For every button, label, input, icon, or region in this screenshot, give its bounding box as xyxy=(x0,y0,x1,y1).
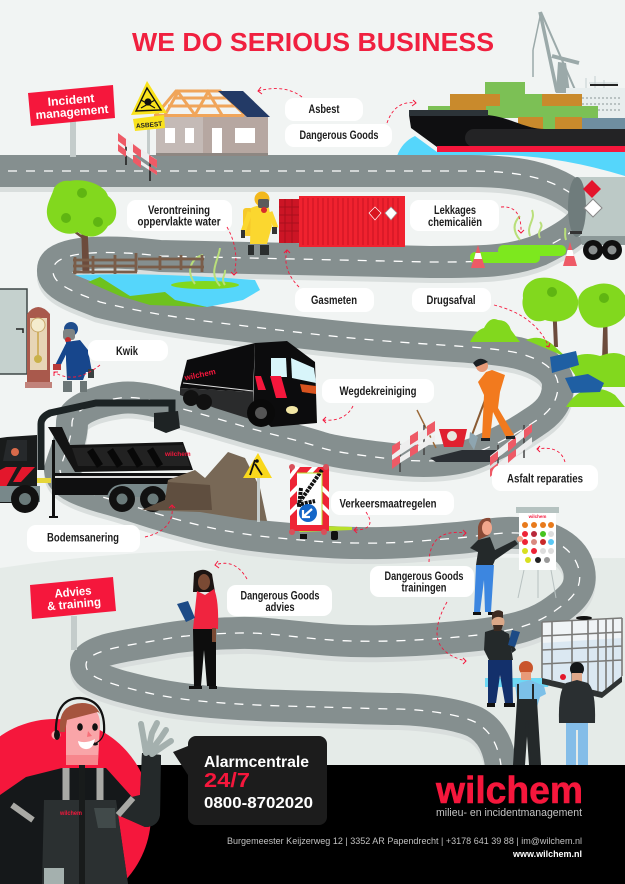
bearded man with clipboard xyxy=(484,610,520,707)
label: dangerous goods trainingen xyxy=(370,566,474,597)
black road cleaning truck: wilchem xyxy=(183,367,217,383)
road network xyxy=(0,171,586,780)
water under ship xyxy=(397,136,625,176)
trees and bushes right xyxy=(470,278,625,407)
label: lekkages chemicalien: chemicaliën xyxy=(428,217,482,229)
IBC tank on pallet xyxy=(485,616,622,698)
label: asbest xyxy=(285,98,363,121)
label: dangerous goods advies: advies xyxy=(266,602,294,614)
label: wegdekreiniging xyxy=(322,379,434,403)
hazmat person xyxy=(241,192,277,255)
label: gasmeten: Gasmeten xyxy=(311,295,357,307)
man in dark jacket xyxy=(559,662,595,765)
alarm centre callout: 24/7 xyxy=(204,770,250,792)
label: drugsafval xyxy=(412,288,491,312)
label: kwik xyxy=(88,340,168,361)
label: dangerous goods xyxy=(285,124,392,147)
label: verontreining oppervlakte water xyxy=(127,200,232,231)
alarm centre callout: Alarmcentrale xyxy=(204,754,309,771)
label: dangerous goods trainingen: Dangerous Goods xyxy=(384,571,464,583)
asbest warning sign xyxy=(131,81,167,156)
red container xyxy=(279,196,405,247)
label: verontreining oppervlakte water: oppervlakte water xyxy=(138,216,221,228)
call centre agent xyxy=(0,698,171,884)
tree left xyxy=(47,180,116,272)
chemical spill with cones xyxy=(470,210,577,268)
label: verkeersmaatregelen: Verkeersmaatregelen xyxy=(340,498,436,510)
label: dangerous goods: Dangerous Goods xyxy=(300,130,378,142)
label: asfalt reparaties: Asfalt reparaties xyxy=(507,474,583,486)
trainer woman xyxy=(470,518,523,615)
flipchart with hazard diamonds xyxy=(516,507,559,598)
advisor woman in red xyxy=(177,570,218,689)
alarm centre callout: 0800-8702020 xyxy=(204,795,313,812)
label: drugsafval: Drugsafval xyxy=(426,295,476,307)
container ship xyxy=(409,76,625,152)
road barrier top xyxy=(118,133,157,181)
pond with reeds and slime xyxy=(75,248,260,307)
sign: incident management xyxy=(28,85,115,157)
label: bodemsanering: Bodemsanering xyxy=(47,532,119,544)
label: verkeersmaatregelen xyxy=(331,491,454,515)
harbour crane xyxy=(533,12,579,93)
road repair: barriers and hole xyxy=(392,410,532,477)
road worker with shovel xyxy=(469,359,515,450)
door xyxy=(0,289,27,374)
label: dangerous goods trainingen: trainingen xyxy=(402,582,446,594)
sign: incident management: Incident xyxy=(47,91,95,109)
label: lekkages chemicalien: Lekkages xyxy=(434,205,476,217)
soil pile xyxy=(142,452,267,521)
label: bodemsanering xyxy=(27,525,140,552)
label: lekkages chemicalien xyxy=(410,200,499,231)
lower landscape band xyxy=(0,550,625,770)
sign: advies and training: Advies xyxy=(54,583,92,601)
footer band xyxy=(0,765,625,884)
black road cleaning truck xyxy=(180,341,317,427)
label: asfalt reparaties xyxy=(492,465,598,491)
contact details: www.wilchem.nl xyxy=(512,849,582,859)
house with roof truss xyxy=(154,91,270,156)
dashed arrows xyxy=(54,87,565,664)
red circle behind agent xyxy=(0,719,151,884)
alarm centre callout xyxy=(173,736,327,825)
asbest warning sign: ASBEST xyxy=(136,121,163,130)
label: dangerous goods advies xyxy=(227,585,332,616)
label: dangerous goods advies: Dangerous Goods xyxy=(240,590,320,602)
title: WE DO SERIOUS BUSINESS xyxy=(132,27,494,57)
sign: incident management: management xyxy=(35,102,109,122)
flipchart with hazard diamonds: wilchem xyxy=(528,514,546,519)
grandfather clock xyxy=(25,307,52,388)
tanker truck xyxy=(568,177,625,260)
big tipper truck with crane: wilchem xyxy=(164,451,191,458)
big tipper truck with crane xyxy=(0,403,195,518)
wilchem logo: wilchem xyxy=(435,770,583,812)
person with gas mask: kwik xyxy=(53,322,94,392)
label: wegdekreiniging: Wegdekreiniging xyxy=(340,386,416,398)
label: asbest: Asbest xyxy=(308,104,340,116)
wilchem logo: milieu- en incidentmanagement xyxy=(436,807,582,819)
label: kwik: Kwik xyxy=(116,346,138,358)
call centre agent: wilchem xyxy=(59,811,82,817)
label: verontreining oppervlakte water: Verontreining xyxy=(148,205,210,217)
man in overalls xyxy=(514,661,546,765)
arrow board on cart xyxy=(289,464,352,540)
road works warning sign xyxy=(243,453,272,522)
sign: advies and training: & training xyxy=(46,595,102,613)
wooden fence xyxy=(73,253,204,274)
label: gasmeten xyxy=(295,288,374,312)
contact details xyxy=(227,836,582,859)
sign: advies and training xyxy=(30,577,116,650)
contact details: Burgemeester Keijzerweg 12 | 3352 AR Papendrecht | +3178 641 39 88 | im@wilchem.nl xyxy=(227,836,582,846)
